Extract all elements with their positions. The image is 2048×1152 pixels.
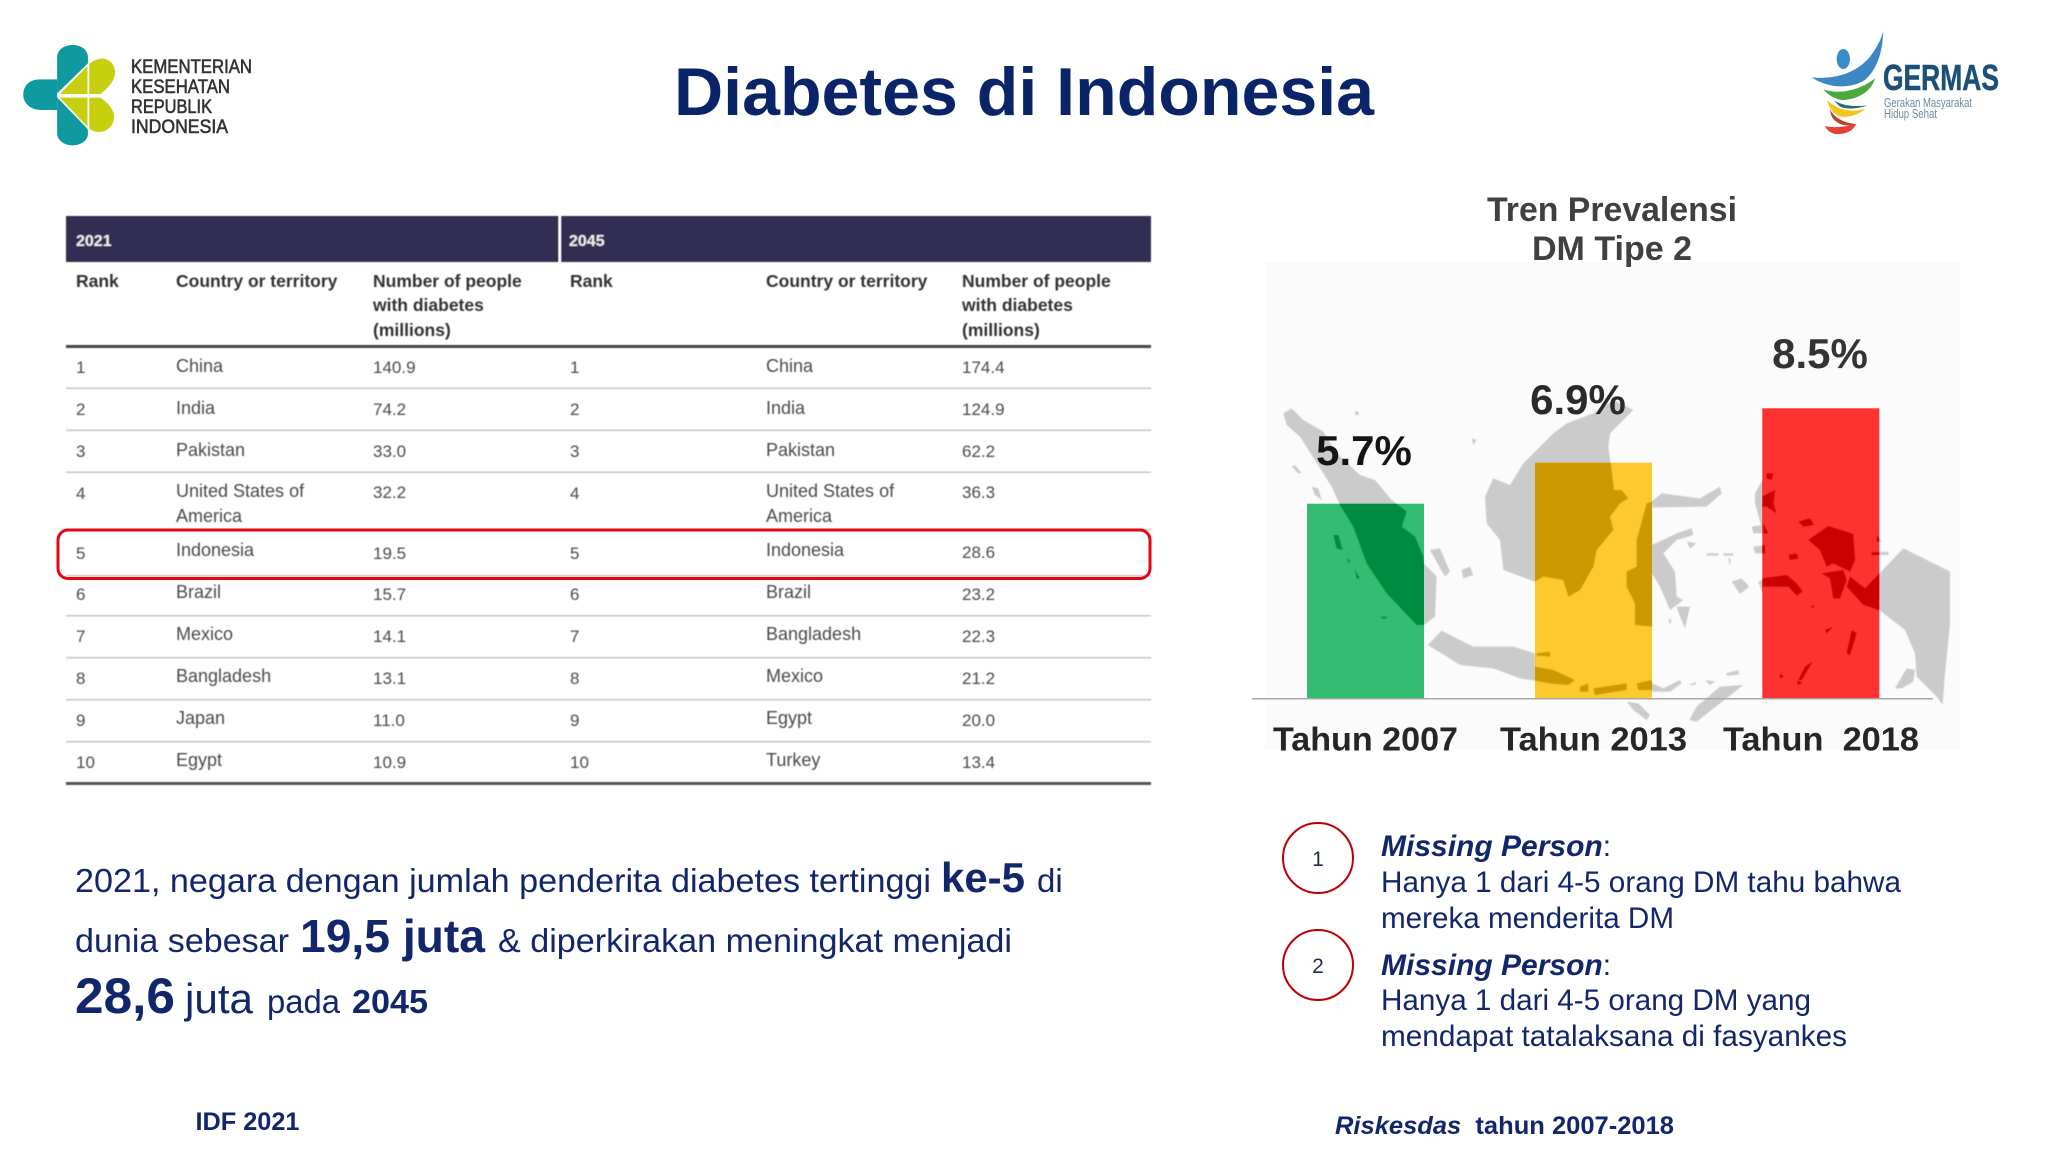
summary text: & diperkirakan meningkat menjadi [498,922,1012,959]
table: top countries by diabetes, 2021 and 2045: (millions) [962,320,1040,340]
table row 1 [76,356,1005,377]
table row 8: 21.2 [962,669,995,688]
table row 7: 7 [570,627,579,646]
logo: Kementerian Kesehatan: KESEHATAN [131,76,230,98]
table row 5: 28.6 [962,543,995,562]
table row 4: America [766,506,833,526]
table row 4: 4 [76,484,85,503]
table row 4 [76,481,995,526]
table row 6: 6 [76,585,85,604]
table row 2: 124.9 [962,400,1005,419]
title: Diabetes di Indonesia [674,54,1375,130]
table row 2: 2 [76,400,85,419]
table: top countries by diabetes, 2021 and 2045: Country or territory [766,271,928,291]
logo: GERMAS: GERMAS [1883,57,1999,98]
table: top countries by diabetes, 2021 and 2045: Country or territory [176,271,338,291]
table row 2 [76,398,1005,419]
summary text: 19,5 juta [300,910,485,962]
table row 8: 13.1 [373,669,406,688]
table row 5 [76,540,995,563]
table row 5: Indonesia [176,540,255,560]
table row 5: Indonesia [766,540,845,560]
callout 2: Missing Person: mendapat tatalaksana di fasyankes [1381,1020,1847,1053]
table row 4: 32.2 [373,483,406,502]
table row 2: 2 [570,400,579,419]
table row 6: 15.7 [373,585,406,604]
table row 1: 1 [570,358,579,377]
table row 3: 33.0 [373,442,406,461]
table row 2: India [176,398,216,418]
map of Indonesia [1283,400,1950,722]
table row 9 [76,708,995,730]
table row 10: 10.9 [373,753,406,772]
summary text: juta [183,975,254,1022]
table row 3 [76,440,995,461]
table row 7: Bangladesh [766,624,861,644]
table row 8 [76,666,995,688]
table row 8: 8 [570,669,579,688]
value labels: 8.5% [1772,330,1868,377]
table: top countries by diabetes, 2021 and 2045: (millions) [373,320,451,340]
table row 1: 1 [76,358,85,377]
summary text: 2045 [352,983,428,1021]
table row 9: 11.0 [373,711,405,730]
bar 2013 [1535,462,1652,698]
table row 10: Turkey [766,750,820,770]
logo: GERMAS: Gerakan Masyarakat [1884,95,1972,110]
table row 3: 3 [76,442,85,461]
table row 1: 140.9 [373,358,416,377]
table row 10 [76,750,995,772]
table: top countries by diabetes, 2021 and 2045: Number of people [373,271,522,291]
summary text: pada [267,983,341,1020]
year labels [1273,722,1919,758]
table row 8: 8 [76,669,85,688]
table row 7: 14.1 [373,627,406,646]
table: top countries by diabetes, 2021 and 2045: Rank [570,271,613,291]
table row 2: 74.2 [373,400,406,419]
table: top countries by diabetes, 2021 and 2045: 2021 [76,233,112,250]
callout 2: Missing Person: Hanya 1 dari 4-5 orang DM yang [1381,984,1811,1017]
table row 4: 4 [570,484,579,503]
callout 2: Missing Person [1283,930,1847,1053]
callout 1: Missing Person: Missing Person: [1381,830,1611,863]
table row 1: 174.4 [962,358,1005,377]
table row 8: Bangladesh [176,666,271,686]
table row 3: Pakistan [766,440,835,460]
table row 9: 20.0 [962,711,995,730]
table row 3: Pakistan [176,440,245,460]
table row 6: Brazil [176,582,221,602]
table row 7 [76,624,995,646]
year labels: Tahun 2018 [1723,722,1919,758]
table row 7: Mexico [176,624,233,644]
logo: Kementerian Kesehatan: REPUBLIK [131,96,212,118]
table row 4: United States of [766,481,895,501]
table row 10: 13.4 [962,753,995,772]
value labels [1316,330,1868,474]
chart title [1487,191,1737,268]
callout 2: Missing Person: Missing Person: [1381,949,1611,982]
table row 1: China [176,356,224,376]
chart title: Tren Prevalensi [1487,191,1737,229]
table row 9: Japan [176,708,225,728]
table: top countries by diabetes, 2021 and 2045: with diabetes [961,295,1073,315]
summary text: ke-5 [941,854,1025,901]
table row 10: Egypt [176,750,222,770]
summary text: di [1037,862,1063,899]
table row 3: 62.2 [962,442,995,461]
table row 10: 10 [570,753,589,772]
source: Riskesdas: Riskesdas tahun 2007-2018 [1335,1112,1674,1140]
callout 2: Missing Person: 2 [1312,955,1324,978]
table row 6 [76,582,995,604]
logo: Kementerian Kesehatan: INDONESIA [131,116,228,138]
value labels: 5.7% [1316,427,1412,474]
table: top countries by diabetes, 2021 and 2045: Number of people [962,271,1111,291]
bar 2007 [1307,504,1424,698]
table row 6: 23.2 [962,585,995,604]
table: top countries by diabetes, 2021 and 2045: Rank [76,271,119,291]
chart title: DM Tipe 2 [1532,230,1692,268]
callout 1: Missing Person: 1 [1312,848,1324,871]
chart: prevalence bars over Indonesia map [1252,339,1950,751]
year labels: Tahun 2007 [1273,722,1458,758]
table row 5: 5 [76,544,85,563]
year labels: Tahun 2013 [1500,722,1687,758]
callout 1: Missing Person [1283,823,1901,935]
table row 7: 7 [76,627,85,646]
logo: GERMAS: Hidup Sehat [1884,106,1937,121]
table row 5: 19.5 [373,544,406,563]
summary text: dunia sebesar [75,922,289,959]
table row 9: 9 [570,711,579,730]
table: top countries by diabetes, 2021 and 2045: with diabetes [372,295,484,315]
table row 3: 3 [570,442,579,461]
highlight: Indonesia row [58,530,1150,578]
table row 9: Egypt [766,708,812,728]
table row 2: India [766,398,806,418]
logo: Kementerian Kesehatan [23,45,252,145]
table row 7: 22.3 [962,627,995,646]
table row 8: Mexico [766,666,823,686]
table row 4: America [176,506,243,526]
callout 1: Missing Person: mereka menderita DM [1381,902,1674,935]
logo: Kementerian Kesehatan: KEMENTERIAN [131,56,252,78]
source: IDF 2021: IDF 2021 [196,1108,300,1136]
table row 4: United States of [176,481,305,501]
table row 10: 10 [76,753,95,772]
table row 1: China [766,356,814,376]
table: top countries by diabetes, 2021 and 2045: 2045 [569,233,605,250]
table row 5: 5 [570,544,579,563]
value labels: 6.9% [1530,376,1626,423]
table: top countries by diabetes, 2021 and 2045 [66,216,1151,785]
summary text [75,854,1063,1024]
table row 9: 9 [76,711,85,730]
table row 6: Brazil [766,582,811,602]
bar 2018 [1762,408,1880,698]
summary text: 28,6 [75,968,175,1024]
table row 4: 36.3 [962,483,995,502]
logo: GERMAS [1812,31,1999,134]
callout 1: Missing Person: Hanya 1 dari 4-5 orang DM tahu bahwa [1381,866,1901,899]
table row 6: 6 [570,585,579,604]
summary text: 2021, negara dengan jumlah penderita diabetes tertinggi [75,862,931,899]
